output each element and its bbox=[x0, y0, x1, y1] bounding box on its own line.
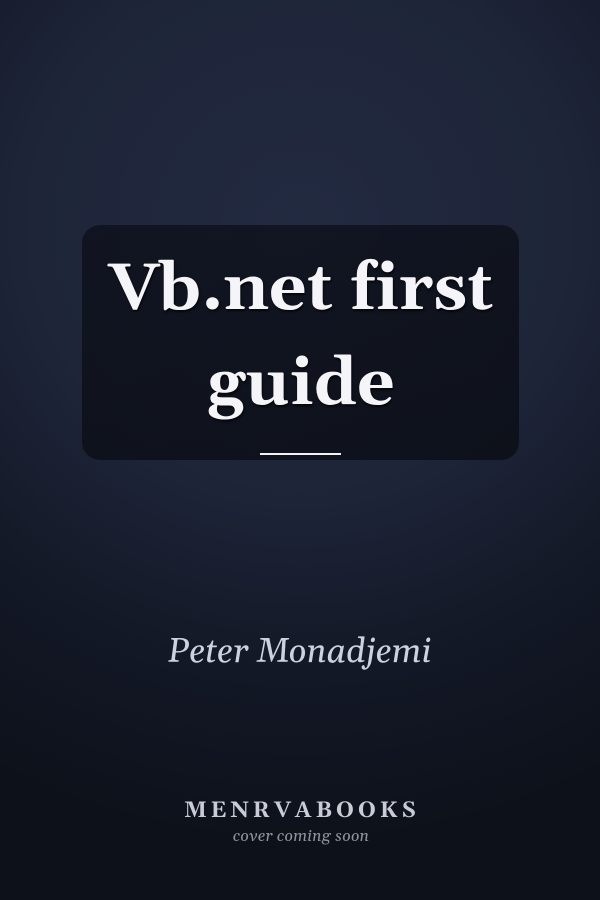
title: guide bbox=[207, 343, 395, 427]
author name: Peter Monadjemi bbox=[168, 630, 432, 674]
title bbox=[107, 248, 494, 427]
cover note: cover coming soon bbox=[233, 827, 369, 847]
title: Vb.net first bbox=[109, 248, 493, 332]
publisher name: MENRVABOOKS bbox=[184, 797, 420, 825]
title panel bbox=[82, 225, 519, 460]
title underline bbox=[260, 453, 341, 455]
